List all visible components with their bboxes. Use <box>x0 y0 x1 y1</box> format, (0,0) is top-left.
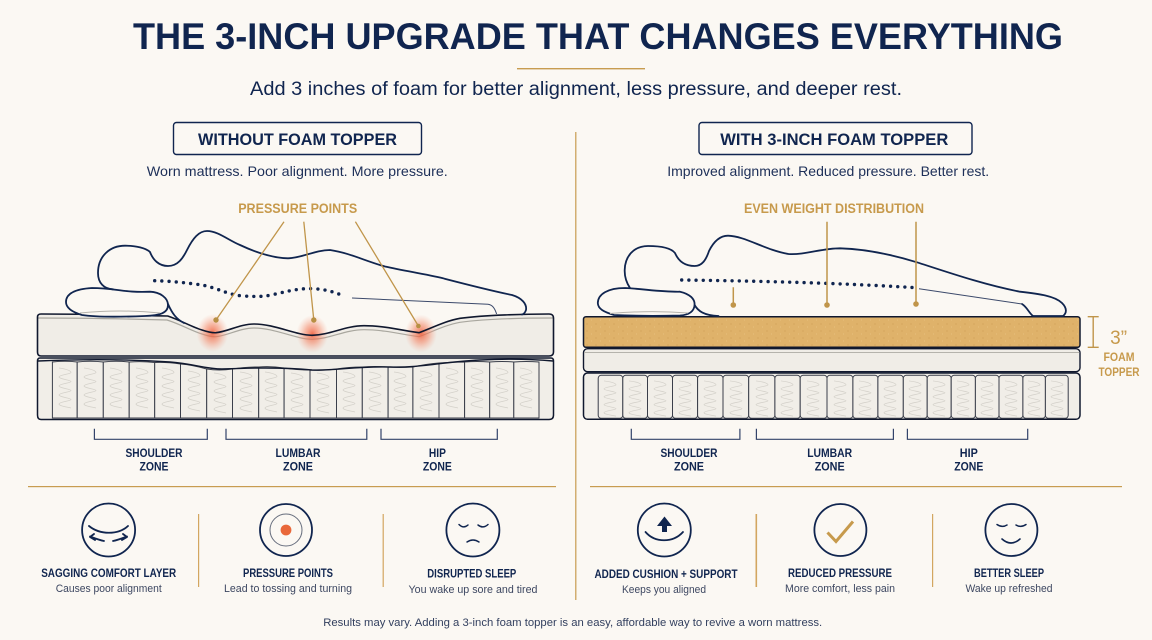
leg line <box>352 298 497 314</box>
callout: disrupted sleep: You wake up sore and tired <box>408 584 538 596</box>
callout: reduced pressure: REDUCED PRESSURE <box>788 568 892 580</box>
spine alignment: straight dotted line <box>682 280 916 288</box>
mattress: comfort layer sagging <box>38 314 554 356</box>
label: pressure points: PRESSURE POINTS <box>238 201 357 216</box>
even weight leaders <box>730 222 919 308</box>
subtitle: Add 3 inches of foam for better alignment, less pressure, and deeper rest. <box>250 79 902 100</box>
zone: hip: ZONE <box>423 462 452 474</box>
foam topper <box>584 317 1080 347</box>
icon: sad sleeping face <box>446 504 499 556</box>
zone: lumbar: ZONE <box>283 462 313 474</box>
icon: target <box>260 504 312 556</box>
label: even weight distribution: EVEN WEIGHT DISTRIBUTION <box>744 201 924 216</box>
callout: pressure points <box>224 504 352 595</box>
zone: lumbar: LUMBAR <box>276 448 321 460</box>
dimension: 3 inch foam topper: FOAM <box>1104 352 1134 364</box>
zone: hip: HIP <box>960 448 978 460</box>
zone: hip: HIP <box>429 448 446 460</box>
title: THE 3-INCH UPGRADE THAT CHANGES EVERYTHING <box>133 16 1063 57</box>
heading: without foam topper: WITHOUT FOAM TOPPER <box>198 130 397 149</box>
heading: without foam topper <box>174 122 422 154</box>
callout: sagging comfort layer: SAGGING COMFORT LAYER <box>41 568 177 580</box>
tagline: with topper: Improved alignment. Reduced pressure. Better rest. <box>667 163 989 179</box>
icon: up arrow on cushion <box>638 504 691 556</box>
callout: better sleep <box>966 504 1052 595</box>
heading: with topper <box>699 122 972 154</box>
pressure glow: lumbar <box>296 315 328 353</box>
pillow <box>598 288 695 316</box>
heading: with topper: WITH 3-INCH FOAM TOPPER <box>720 130 948 149</box>
callout: better sleep: BETTER SLEEP <box>974 568 1044 580</box>
mattress: spring base sagging <box>38 358 554 420</box>
zone: lumbar <box>756 429 893 474</box>
footnote: Results may vary. Adding a 3-inch foam topper is an easy, affordable way to revive a worn mattress. <box>323 617 822 629</box>
callout: sagging comfort layer <box>41 504 177 595</box>
sleeper outline <box>625 236 1066 316</box>
callout: reduced pressure: More comfort, less pain <box>785 583 895 595</box>
mattress: spring base <box>584 373 1080 419</box>
callout: added cushion and support: ADDED CUSHION + SUPPORT <box>594 569 738 581</box>
callout: added cushion and support: Keeps you aligned <box>622 584 706 596</box>
zone: shoulder: SHOULDER <box>660 448 718 460</box>
pillow <box>66 288 168 317</box>
zone: lumbar: ZONE <box>815 462 845 474</box>
mattress: comfort layer <box>584 349 1080 372</box>
zone: hip <box>381 429 497 474</box>
zone: shoulder: SHOULDER <box>126 448 183 460</box>
callouts: benefits with topper <box>594 504 1052 596</box>
zone: shoulder: ZONE <box>674 462 704 474</box>
zone: shoulder <box>631 429 740 474</box>
zone: lumbar <box>226 429 367 474</box>
callouts: problems without topper <box>41 504 537 596</box>
icon: smiling sleeping face <box>985 504 1037 556</box>
callout: pressure points: Lead to tossing and turning <box>224 583 352 595</box>
dimension: 3 inch foam topper <box>1088 317 1140 379</box>
spine alignment: curved dotted line <box>155 281 345 297</box>
zone: hip <box>907 429 1028 474</box>
zone: hip: ZONE <box>954 462 984 474</box>
zone: shoulder: ZONE <box>140 462 169 474</box>
callout: better sleep: Wake up refreshed <box>966 583 1052 595</box>
icon: sagging layer with arrows <box>82 504 135 556</box>
leg line <box>919 289 1022 304</box>
title rule <box>517 68 645 69</box>
panel: without foam topper <box>28 122 556 487</box>
zone: shoulder <box>94 429 207 474</box>
callout: added cushion and support <box>594 504 738 596</box>
callout: disrupted sleep: DISRUPTED SLEEP <box>427 568 517 580</box>
callout: disrupted sleep <box>408 504 538 596</box>
sleeper outline <box>98 231 526 323</box>
tagline: without topper: Worn mattress. Poor alignment. More pressure. <box>147 163 448 179</box>
pressure glow: shoulder <box>196 314 228 352</box>
callout: reduced pressure <box>785 504 895 595</box>
dimension: 3 inch foam topper: 3” <box>1110 328 1127 349</box>
pressure point leaders <box>213 222 421 328</box>
dimension: 3 inch foam topper: TOPPER <box>1098 367 1140 379</box>
icon: check mark <box>814 504 866 556</box>
panel: with 3-inch foam topper <box>584 122 1140 487</box>
pressure glow: hip <box>405 314 437 352</box>
zone: lumbar: LUMBAR <box>807 448 853 460</box>
callout: pressure points: PRESSURE POINTS <box>243 568 333 580</box>
callout: sagging comfort layer: Causes poor alignment <box>56 583 162 595</box>
center divider <box>575 132 576 600</box>
